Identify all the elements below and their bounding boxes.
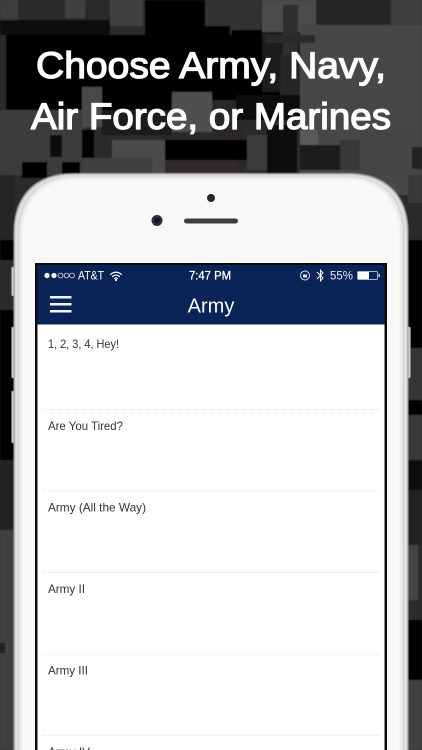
title: Choose Army, Navy, bbox=[36, 45, 386, 86]
status bar: battery percent: 55% bbox=[330, 268, 353, 282]
list item: Army II: Army II bbox=[48, 582, 85, 596]
title: Air Force, or Marines bbox=[31, 96, 391, 137]
icon: battery bbox=[358, 272, 380, 280]
speaker bbox=[184, 218, 238, 224]
phone body bbox=[14, 173, 408, 750]
list item: Are You Tired?: Are You Tired? bbox=[48, 419, 123, 433]
front camera bbox=[152, 215, 162, 226]
sensor dot bbox=[207, 194, 215, 202]
list item: Army III: Army III bbox=[48, 664, 88, 678]
list background bbox=[38, 324, 384, 750]
icon: wifi bbox=[110, 272, 122, 280]
status bar: signal and carrier: AT&T bbox=[78, 268, 105, 282]
app header bar bbox=[38, 265, 384, 324]
screen bbox=[35, 263, 387, 750]
icon: hamburger menu bbox=[50, 296, 72, 312]
list item: Army (All the Way): Army (All the Way) bbox=[48, 501, 146, 515]
phone mockup bbox=[12, 173, 410, 750]
song list bbox=[48, 337, 146, 750]
title bbox=[31, 45, 391, 137]
icon: rotation lock bbox=[300, 271, 310, 280]
status bar: time: 7:47 PM bbox=[189, 268, 231, 282]
status bar: signal and carrier bbox=[44, 268, 105, 282]
icon: bluetooth bbox=[317, 270, 323, 281]
screen title: Army bbox=[188, 296, 234, 318]
list item: 1, 2, 3, 4, Hey!: 1, 2, 3, 4, Hey! bbox=[48, 337, 119, 351]
side buttons bbox=[12, 267, 410, 443]
